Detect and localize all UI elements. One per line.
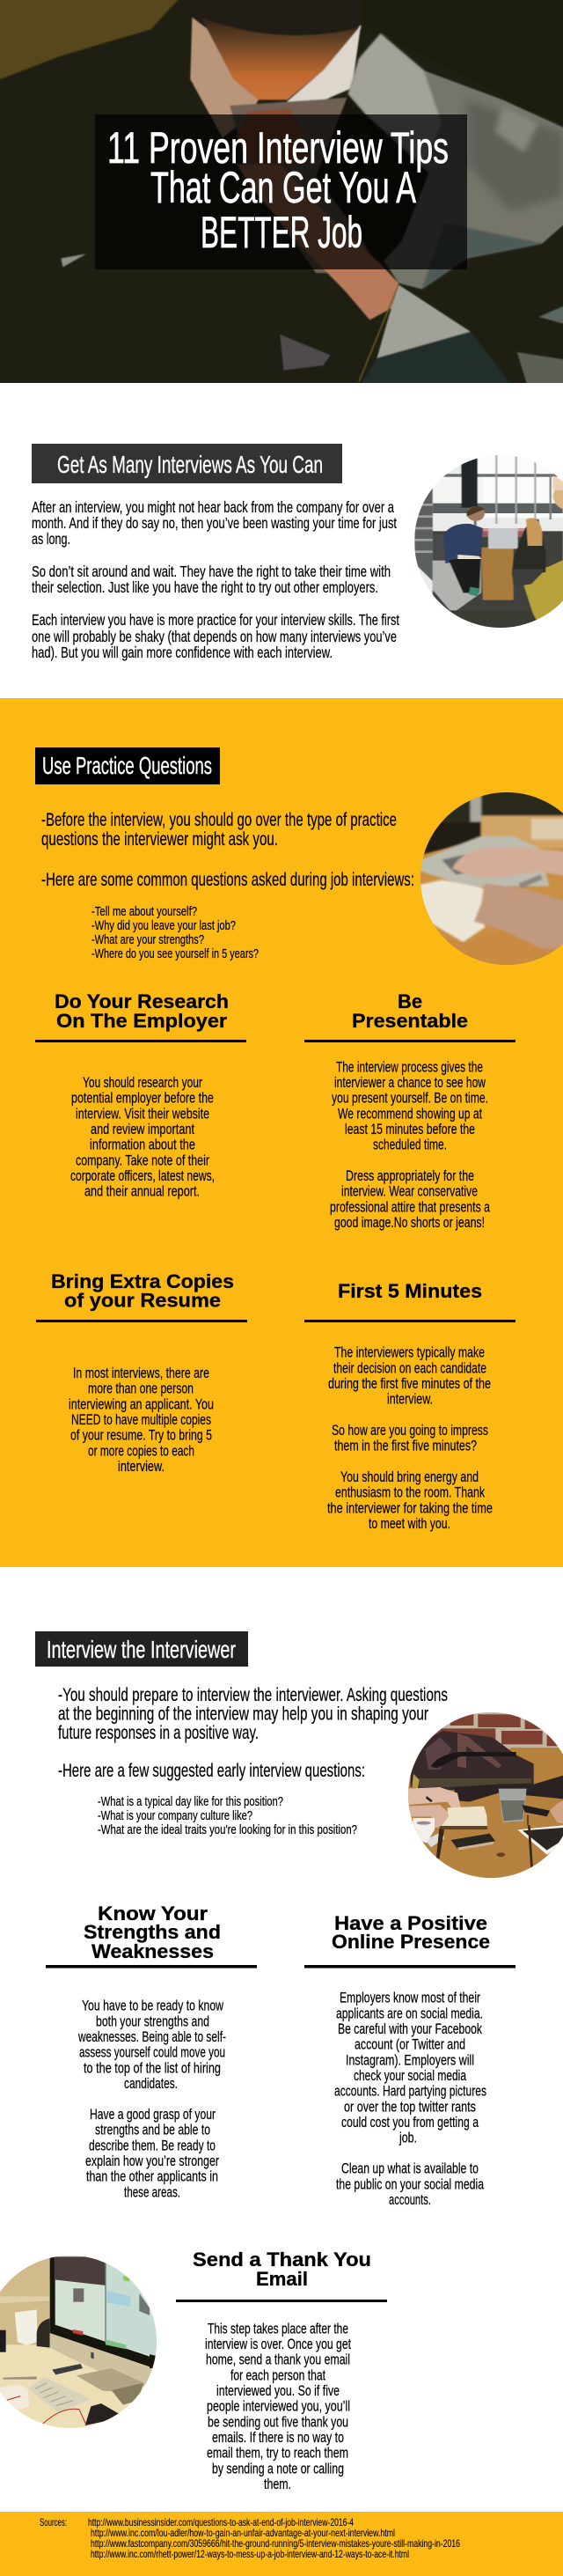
text block: strengths body: these areas. [124,2184,180,2200]
list: common questions: -Where do you see yourself in 5 years? [91,946,259,961]
text block: practice intro: -Here are some common questions asked during job interviews: [41,870,414,890]
list: common questions [91,904,259,961]
photo: meeting on sofa [413,453,563,631]
text block: thank you body: them. [264,2477,291,2492]
text block: online presence body: Employers know most of their [340,1991,480,2006]
list: common questions: -What are your strengths? [91,932,204,947]
text block: thank you body: email them, try to reach them [207,2446,348,2462]
text block: research body: You should research your [83,1075,202,1091]
text block: thank you body: be sending out five thank you [208,2414,348,2430]
text block: interviews body: one will probably be shaky (that depends on how many interviews you’ve [32,628,397,645]
text block: interviewer intro: -Here are a few suggested early interview questions: [58,1761,365,1781]
text block: copies body: or more copies to each [88,1443,194,1459]
heading: get as many interviews [32,444,342,483]
title box: That Can Get You A [150,163,416,212]
text block: presentable body: Dress appropriately for the [346,1168,474,1184]
panel: do your research [35,990,246,1200]
text block: research body [70,1075,215,1200]
text block: sources footer: http://www.inc.com/lou-adler/how-to-gain-an-unfair-advantage-at-your-next-interview.html [91,2527,395,2539]
heading: first 5 minutes [304,1280,515,1322]
text block: sources footer: http://www.businessinsider.com/questions-to-ask-at-end-of-job-interview-2016-4 [88,2516,354,2528]
text block: strengths body [77,1998,226,2200]
text block: copies body: In most interviews, there are [73,1365,209,1381]
text block: first 5 minutes body [327,1345,493,1532]
text block: online presence body [334,1991,486,2208]
text block: interviews body: After an interview, you might not hear back from the company for over a [32,498,394,516]
list: suggested questions: -What is your company culture like? [98,1808,252,1823]
text block: sources footer [40,2516,460,2560]
text block: strengths body: candidates. [124,2076,178,2092]
text block: interviews body: as long. [32,530,70,548]
heading: bring extra copies: of your Resume [64,1289,221,1312]
panel: bring extra copies [36,1270,247,1475]
text block: research body: potential employer before the [71,1091,214,1107]
text block: presentable body: least 15 minutes before the [345,1122,475,1137]
text block: strengths body: strengths and be able to [95,2123,210,2138]
text block: presentable body: interview. Wear conservative [341,1184,478,1200]
heading: get as many interviews: Get As Many Interviews As You Can [57,451,323,478]
heading: know your strengths: Strengths and [84,1921,221,1943]
text block: first 5 minutes body: So how are you going to impress [332,1423,488,1439]
text block: first 5 minutes body: the interviewer for taking the time [327,1500,493,1516]
text block: presentable body: good image.No shorts or jeans! [334,1215,485,1231]
heading: positive online presence [304,1912,515,1969]
text block: copies body: more than one person [88,1381,194,1397]
text block: online presence body: Instagram). Employers will [346,2052,474,2068]
text block: online presence body: accounts. [389,2192,431,2208]
heading: positive online presence: Have a Positive [334,1912,487,1934]
text block: first 5 minutes body: them in the first five minutes? [334,1439,477,1454]
text block: thank you body [205,2321,351,2492]
text block: practice intro: -Before the interview, you should go over the type of practice [41,810,397,830]
text block: first 5 minutes body: The interviewers typically make [334,1345,485,1361]
text block: sources footer: Sources: [40,2516,67,2528]
section: use practice questions [35,747,563,1532]
photo: table with bag and notebook [405,1708,563,1884]
list: common questions: -Why did you leave your last job? [91,918,236,933]
text block: presentable body: professional attire that presents a [330,1199,491,1215]
list: suggested questions [98,1794,357,1837]
heading: use practice questions: Use Practice Questions [42,752,212,779]
text block: interviews body [32,498,399,661]
panel: yellow section background [0,698,563,1567]
panel: know your strengths [46,1903,257,2200]
text block: research body: information about the [90,1137,195,1153]
text block: practice intro: questions the interviewer might ask you. [41,829,278,850]
text block: thank you body: by sending a note or calling [212,2461,344,2477]
text block: online presence body: Clean up what is available to [341,2161,479,2177]
text block: thank you body: people interviewed you, you’ll [207,2399,350,2415]
photo: desk with iMac [0,2254,158,2430]
heading: interview the interviewer: Interview the Interviewer [47,1636,236,1663]
text block: strengths body: explain how you’re stronger [85,2153,219,2169]
text block: presentable body [330,1059,491,1231]
text block: strengths body: both your strengths and [96,2013,209,2029]
text block: presentable body: The interview process gives the [336,1059,483,1075]
text block: thank you body: for each person that [230,2367,325,2383]
panel: be presentable [304,990,515,1231]
text block: interviews body: their selection. Just like you have the right to try out other employers. [32,578,378,596]
heading: do your research: On The Employer [56,1010,227,1032]
text block: research body: interview. Visit their website [76,1106,209,1122]
text block: online presence body: accounts. Hard partying pictures [334,2084,486,2100]
text block: research body: corporate officers, latest news, [70,1168,215,1184]
text block: thank you body: This step takes place after the [208,2321,348,2337]
text block: interviews body: So don’t sit around and wait. They have the right to take their time with [32,563,391,580]
panel: footer background [0,2512,563,2576]
text block: research body: company. Take note of their [76,1152,209,1168]
heading: be presentable [304,990,515,1042]
text block: first 5 minutes body: interview. [387,1392,433,1408]
title box: BETTER Job [201,208,362,257]
section: interview the interviewer [0,1631,563,2492]
text block: online presence body: could cost you from getting a [341,2115,479,2131]
text block: strengths body: assess yourself could move you [79,2045,225,2061]
text block: strengths body: You have to be ready to know [82,1998,223,2014]
text block: strengths body: Have a good grasp of your [90,2107,216,2123]
section: get as many interviews [32,444,563,661]
text block: first 5 minutes body: enthusiasm to the room. Thank [335,1485,486,1501]
text block: strengths body: describe them. Be ready to [89,2138,216,2153]
text block: interviewer intro: at the beginning of the interview may help you in shaping your [58,1704,428,1724]
title box [95,114,467,269]
text block: copies body: NEED to have multiple copies [71,1412,211,1428]
text block: first 5 minutes body: their decision on each candidate [333,1360,486,1376]
heading: positive online presence: Online Presence [332,1931,490,1953]
heading: do your research: Do Your Research [55,990,229,1012]
panel: first 5 minutes [304,1280,515,1532]
list: suggested questions: -What are the ideal traits you're looking for in this position? [98,1822,357,1837]
text block: presentable body: We recommend showing up at [338,1106,482,1122]
text block: presentable body: scheduled time. [373,1137,447,1153]
hero photo: man adjusting tie [0,0,563,387]
panel: hero [0,0,563,387]
heading: interview the interviewer [35,1631,248,1667]
text block: online presence body: applicants are on social media. [336,2006,483,2021]
text block: strengths body: than the other applicants in [86,2169,218,2185]
heading: be presentable: Be [398,990,422,1012]
text block: strengths body: weaknesses. Being able to self- [77,2029,226,2045]
heading: send a thank you email: Email [256,2268,308,2290]
heading: bring extra copies [36,1270,247,1322]
text block: first 5 minutes body: to meet with you. [369,1516,450,1532]
text block: sources footer: http://www.inc.com/rhett-power/12-ways-to-mess-up-a-job-interview-and-12-ways-to-ace-it.html [91,2548,409,2560]
text block: online presence body: account (or Twitter and [355,2037,465,2053]
heading: know your strengths [46,1903,257,1969]
text block: copies body: of your resume. Try to bring 5 [70,1428,212,1444]
text block: interviewer intro: future responses in a positive way. [58,1723,259,1743]
heading: be presentable: Presentable [352,1010,468,1032]
text block: presentable body: you present yourself. Be on time. [332,1091,488,1107]
heading: bring extra copies: Bring Extra Copies [51,1270,234,1292]
heading: know your strengths: Know Your [98,1903,208,1925]
text block: thank you body: home, send a thank you email [206,2352,350,2368]
text block: interviews body: Each interview you have is more practice for your interview skills. The first [32,611,399,629]
photo: hands writing notes [420,792,563,965]
text block: practice intro [41,810,414,890]
heading: send a thank you email [176,2248,387,2302]
text block: first 5 minutes body: during the first five minutes of the [328,1376,491,1392]
text block: presentable body: interviewer a chance to see how [334,1075,486,1091]
text block: online presence body: Be careful with your Facebook [338,2021,483,2037]
text block: interviews body: month. And if they do say no, then you’ve been wasting your time for just [32,514,397,532]
heading: use practice questions [35,747,220,784]
text block: thank you body: interview is over. Once you get [205,2337,351,2352]
heading: first 5 minutes: First 5 Minutes [338,1280,482,1302]
text block: interviews body: had). But you will gain more confidence with each interview. [32,644,333,661]
panel: positive online presence [304,1912,515,2208]
text block: thank you body: emails. If there is no way to [212,2430,344,2446]
text block: online presence body: job. [398,2131,417,2146]
text block: strengths body: to the top of the list of hiring [84,2060,221,2076]
text block: copies body: interviewing an applicant. You [69,1396,214,1412]
text block: thank you body: interviewed you. So if five [216,2383,340,2399]
text block: online presence body: or over the top twitter rants [344,2099,476,2115]
list: common questions: -Tell me about yourself? [91,904,197,919]
text block: research body: and their annual report. [84,1184,200,1200]
text block: online presence body: check your social media [354,2068,467,2084]
text block: first 5 minutes body: You should bring energy and [340,1469,479,1485]
panel: send a thank you email [176,2248,387,2492]
heading: send a thank you email: Send a Thank You [193,2248,371,2271]
text block: interviewer intro [58,1685,448,1781]
text block: research body: and review important [91,1122,194,1137]
heading: know your strengths: Weaknesses [91,1940,214,1962]
list: suggested questions: -What is a typical day like for this position? [98,1794,283,1809]
text block: copies body: interview. [118,1459,165,1475]
text block: copies body [69,1365,214,1475]
text block: online presence body: the public on your social media [336,2176,485,2192]
heading: do your research [35,990,246,1042]
